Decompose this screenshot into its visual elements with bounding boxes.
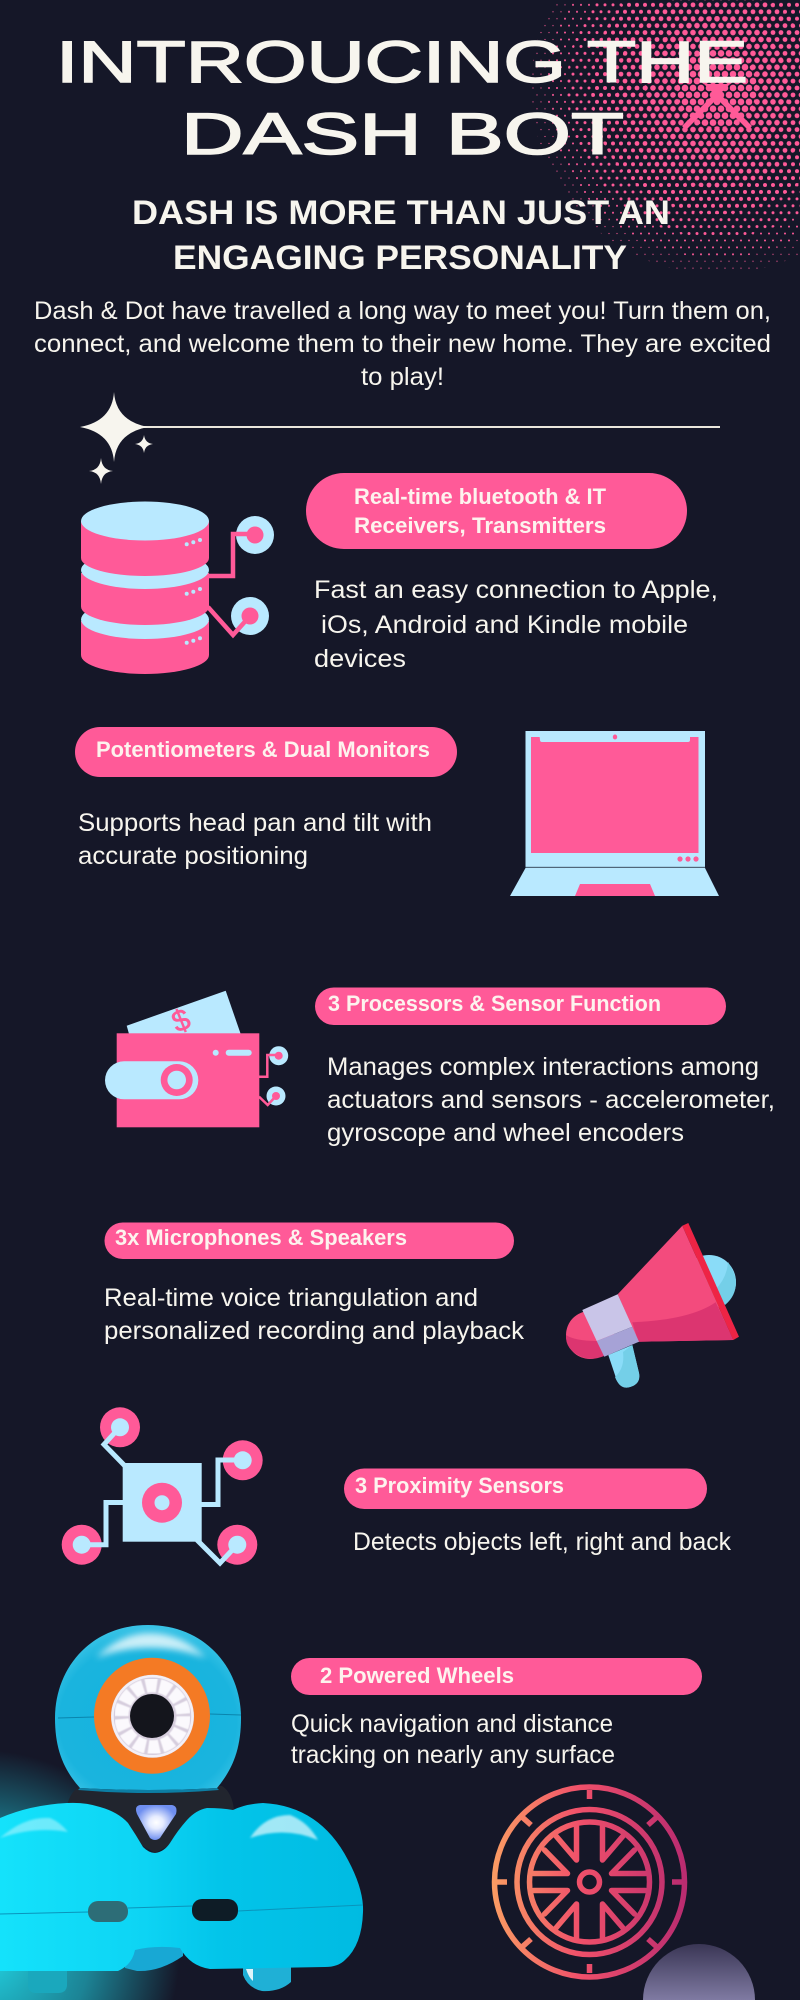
robot head	[55, 1625, 241, 1793]
pill heading: wheels: 2 Powered Wheels	[320, 1663, 514, 1688]
body text: bluetooth: iOs, Android and Kindle mobile	[321, 611, 688, 639]
intro paragraph: Dash & Dot have travelled a long way to meet you! Turn them on,	[34, 297, 771, 325]
pill heading: bluetooth: Receivers, Transmitters	[354, 513, 606, 538]
body text: bluetooth: devices	[314, 645, 406, 673]
pill heading: microphones	[104, 1222, 514, 1259]
pill heading: wheels	[291, 1658, 702, 1695]
icon: wallet	[105, 991, 288, 1127]
subtitle: DASH IS MORE THAN JUST AN	[132, 194, 670, 232]
pill heading: bluetooth	[306, 473, 687, 549]
icon: megaphone	[566, 1223, 739, 1388]
robot feet and underside	[28, 1945, 291, 1993]
body text: potentiometers	[78, 809, 432, 870]
robot neck	[67, 1786, 234, 1853]
icon: wallet: $	[167, 1003, 195, 1039]
section: microphones	[104, 1222, 739, 1388]
icon: wheel	[492, 1787, 687, 1977]
robot eye	[94, 1658, 210, 1774]
title: DASH BOT	[181, 102, 624, 167]
body text: processors	[327, 1053, 775, 1147]
body text: processors: gyroscope and wheel encoders	[327, 1119, 684, 1147]
pill heading: processors	[315, 988, 726, 1025]
body text: microphones	[104, 1284, 525, 1345]
body text: wheels: Quick navigation and distance	[291, 1710, 613, 1738]
section: processors	[105, 988, 775, 1147]
body text: potentiometers: accurate positioning	[78, 842, 308, 870]
pill heading: potentiometers: Potentiometers & Dual Monitors	[96, 737, 430, 762]
pill heading: processors: 3 Processors & Sensor Function	[328, 991, 661, 1016]
body text: proximity: Detects objects left, right and back	[353, 1528, 731, 1556]
body text: wheels	[291, 1710, 615, 1769]
pill heading: microphones: 3x Microphones & Speakers	[115, 1225, 407, 1250]
icon: laptop	[510, 731, 719, 896]
title: INTROUCING THE	[56, 30, 748, 95]
robot: Dash	[0, 1625, 363, 1993]
pill heading: proximity	[344, 1468, 707, 1509]
halftone dot burst	[528, 0, 800, 276]
icon: database	[81, 502, 274, 674]
icon: chip	[62, 1407, 263, 1565]
subtitle: ENGAGING PERSONALITY	[173, 239, 627, 277]
pill heading: proximity: 3 Proximity Sensors	[355, 1473, 564, 1498]
intro paragraph	[34, 297, 771, 391]
robot body	[0, 1803, 363, 1971]
section: potentiometers	[75, 727, 719, 896]
pill heading: bluetooth: Real-time bluetooth & IT	[354, 484, 607, 509]
section: bluetooth	[81, 473, 718, 674]
body text: bluetooth	[314, 576, 718, 673]
robot crystal light	[136, 1805, 176, 1840]
body text: bluetooth: Fast an easy connection to Apple,	[314, 576, 718, 604]
intro paragraph: to play!	[361, 363, 444, 391]
teal glow	[0, 1745, 185, 2000]
subtitle	[132, 194, 670, 277]
body text: microphones: Real-time voice triangulation and	[104, 1284, 478, 1312]
body text: wheels: tracking on nearly any surface	[291, 1741, 615, 1769]
body text: microphones: personalized recording and playback	[104, 1317, 525, 1345]
body text: processors: Manages complex interactions among	[327, 1053, 759, 1081]
divider with sparkles	[80, 392, 720, 484]
pill heading: potentiometers	[75, 727, 457, 777]
decorative lavender circle	[643, 1944, 755, 2000]
body text: potentiometers: Supports head pan and tilt with	[78, 809, 432, 837]
intro paragraph: connect, and welcome them to their new home. They are excited	[34, 330, 771, 358]
section: wheels	[291, 1658, 702, 1977]
section: proximity sensors	[62, 1407, 731, 1565]
body text: processors: actuators and sensors - accelerometer,	[327, 1086, 775, 1114]
title	[56, 30, 748, 167]
